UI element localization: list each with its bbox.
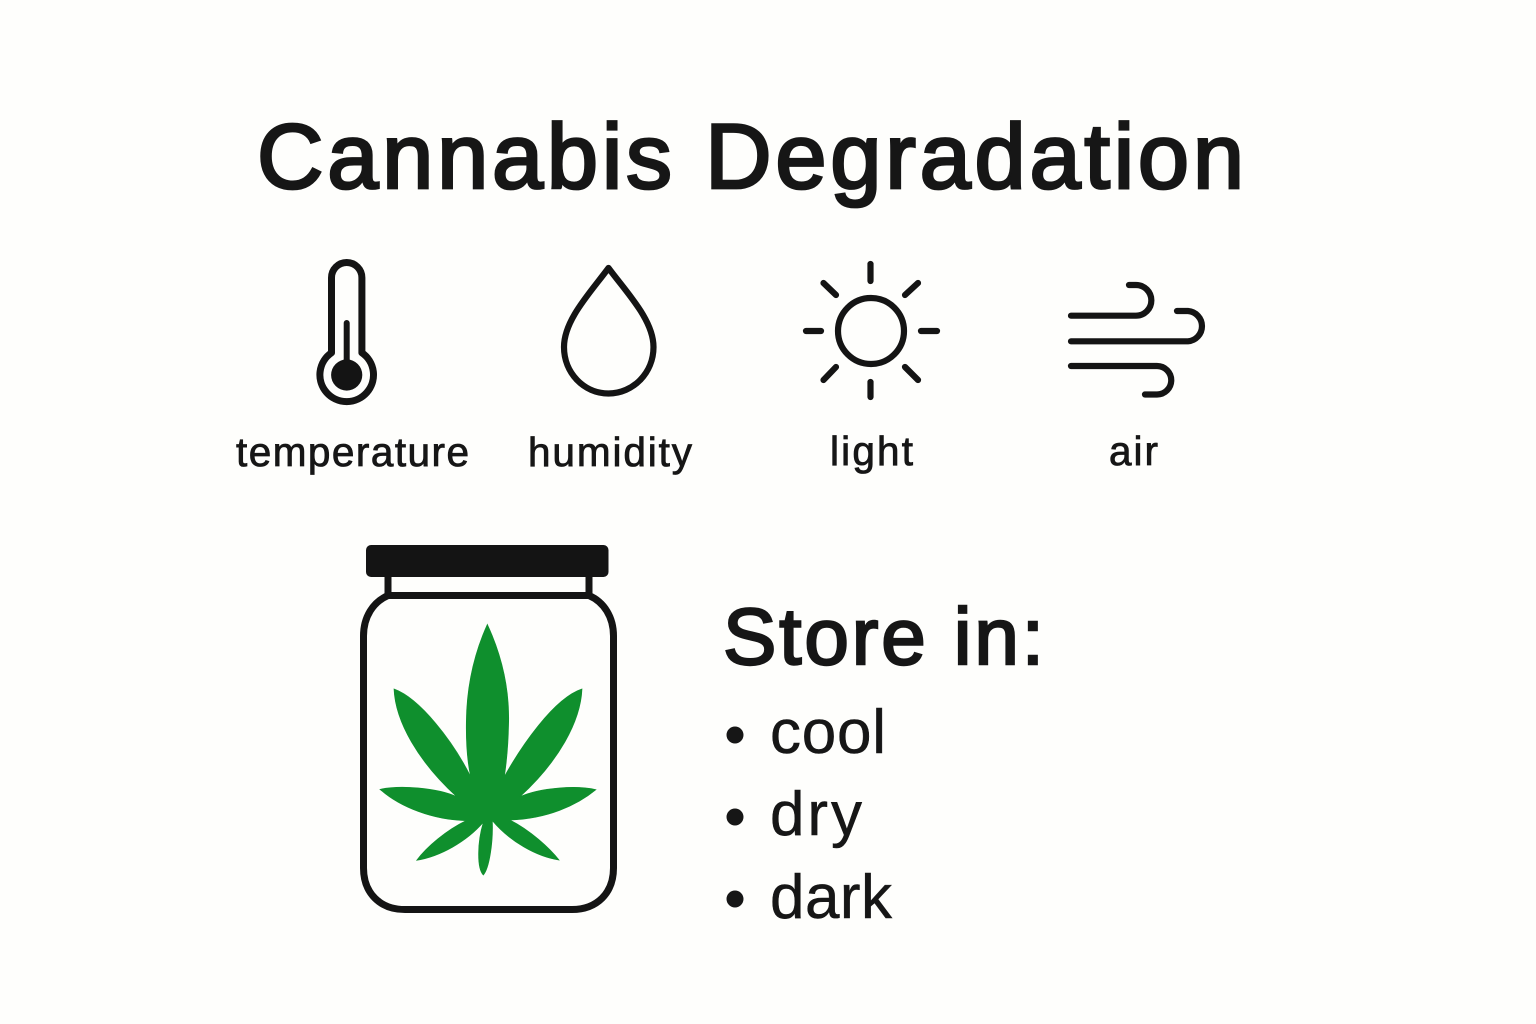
label: light: light	[830, 428, 913, 474]
jar body	[364, 577, 614, 910]
bullet: dry: dry	[770, 780, 862, 849]
cannabis leaf	[380, 624, 596, 875]
storage advice	[723, 592, 1044, 932]
heading: store in: Store in:	[723, 592, 1044, 681]
icon: storage jar with leaf	[364, 545, 614, 910]
icon: wind	[1071, 285, 1202, 395]
label: temperature: temperature	[236, 429, 469, 475]
icon: sun	[806, 264, 937, 397]
icon: water drop	[564, 268, 654, 394]
label: air: air	[1109, 428, 1158, 474]
label: humidity: humidity	[528, 429, 693, 475]
factor row	[236, 263, 1202, 475]
icon: thermometer	[320, 263, 374, 402]
bullet: dark: dark	[770, 863, 893, 932]
bullet: cool: cool	[770, 698, 886, 767]
bullet: dry	[726, 780, 862, 849]
jar lid	[366, 545, 608, 577]
title: Cannabis Degradation	[257, 106, 1244, 208]
